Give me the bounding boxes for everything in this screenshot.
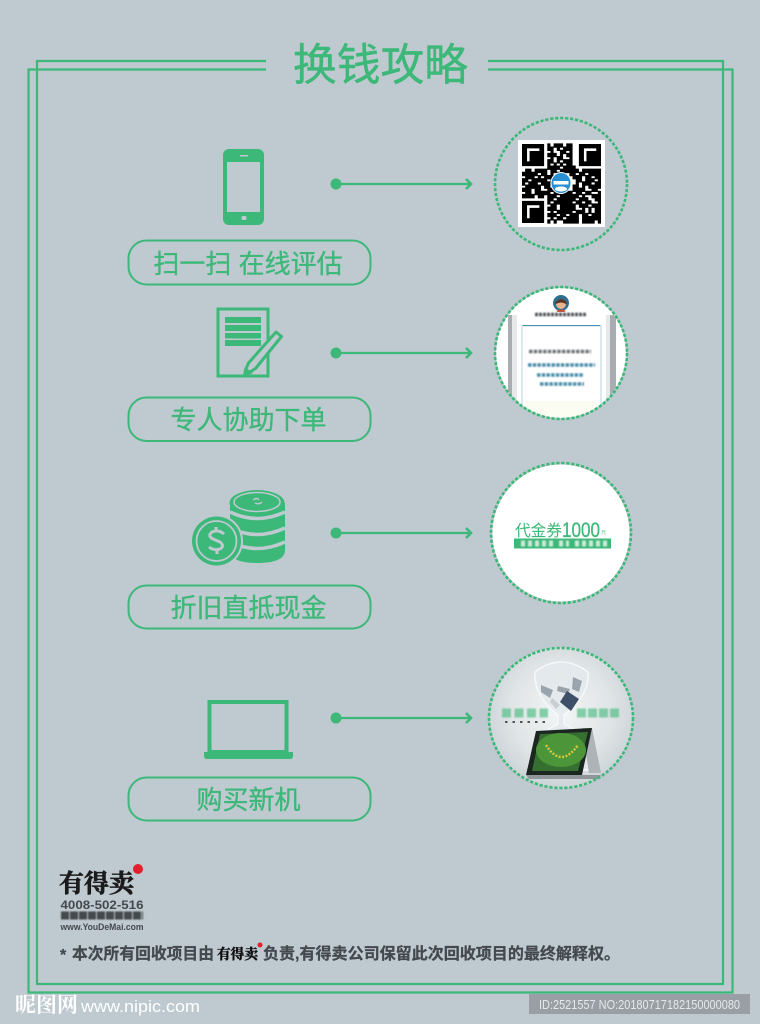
title: 换钱攻略 — [293, 41, 468, 90]
footnote: 负责,有得卖公司保留此次回收项目的最终解释权。 — [263, 944, 620, 963]
step 2: assisted order — [128, 287, 627, 441]
arrow — [330, 712, 471, 724]
arrow — [330, 348, 471, 358]
label pill — [128, 586, 370, 628]
label pill: 扫一扫 在线评估 — [153, 249, 343, 279]
footnote: 本次所有回收项目由 — [72, 945, 214, 963]
label pill: 专人协助下单 — [170, 405, 327, 435]
blurred slogan left — [502, 708, 548, 718]
blurred tagline — [505, 721, 547, 723]
QR finder squares — [522, 144, 601, 223]
footnote: 有得卖 — [217, 946, 259, 963]
consultant screenshot circle — [495, 287, 627, 419]
laptop with green screen — [526, 728, 601, 779]
footnote — [60, 942, 620, 964]
label pill — [128, 778, 370, 820]
phone number: 4008-502-516 — [60, 898, 144, 912]
watermark logo — [15, 993, 200, 1017]
voucher band — [514, 538, 611, 548]
logo dot — [133, 864, 143, 874]
icon: coins — [190, 490, 285, 568]
label pill — [128, 240, 370, 284]
watermark logo: 昵图网 — [15, 993, 78, 1017]
laptop photo circle — [489, 647, 633, 789]
arrow — [330, 178, 471, 190]
logo wordmark: 有得卖 — [59, 870, 135, 898]
website: www.YouDeMai.com — [60, 922, 144, 933]
icon: laptop — [204, 702, 293, 759]
label pill — [128, 398, 370, 441]
step 3: trade-in as cash — [128, 463, 631, 628]
QR centre logo — [550, 172, 572, 194]
label pill: 购买新机 — [196, 785, 301, 815]
QR code — [522, 144, 601, 223]
hourglass — [528, 662, 596, 770]
icon: smartphone — [223, 149, 264, 225]
voucher unit: 元 — [601, 530, 606, 536]
voucher circle — [491, 463, 631, 603]
arrow — [330, 528, 471, 538]
step 4: buy a new laptop — [128, 647, 633, 820]
icon: document and pencil — [218, 309, 282, 377]
label pill: 折旧直抵现金 — [170, 593, 327, 623]
blurred tagline — [61, 912, 143, 920]
step 1: scan and assess — [128, 118, 627, 284]
voucher amount: 代金券 — [515, 522, 562, 540]
voucher value: 1000 — [562, 519, 600, 542]
blurred text lines — [528, 314, 595, 384]
avatar — [553, 295, 569, 312]
blurred slogan right — [577, 708, 620, 718]
watermark id box — [529, 994, 750, 1014]
footnote: * — [60, 947, 67, 964]
watermark logo: www.nipic.com — [80, 997, 200, 1016]
brand block — [59, 864, 144, 933]
QR code circle — [495, 118, 627, 250]
